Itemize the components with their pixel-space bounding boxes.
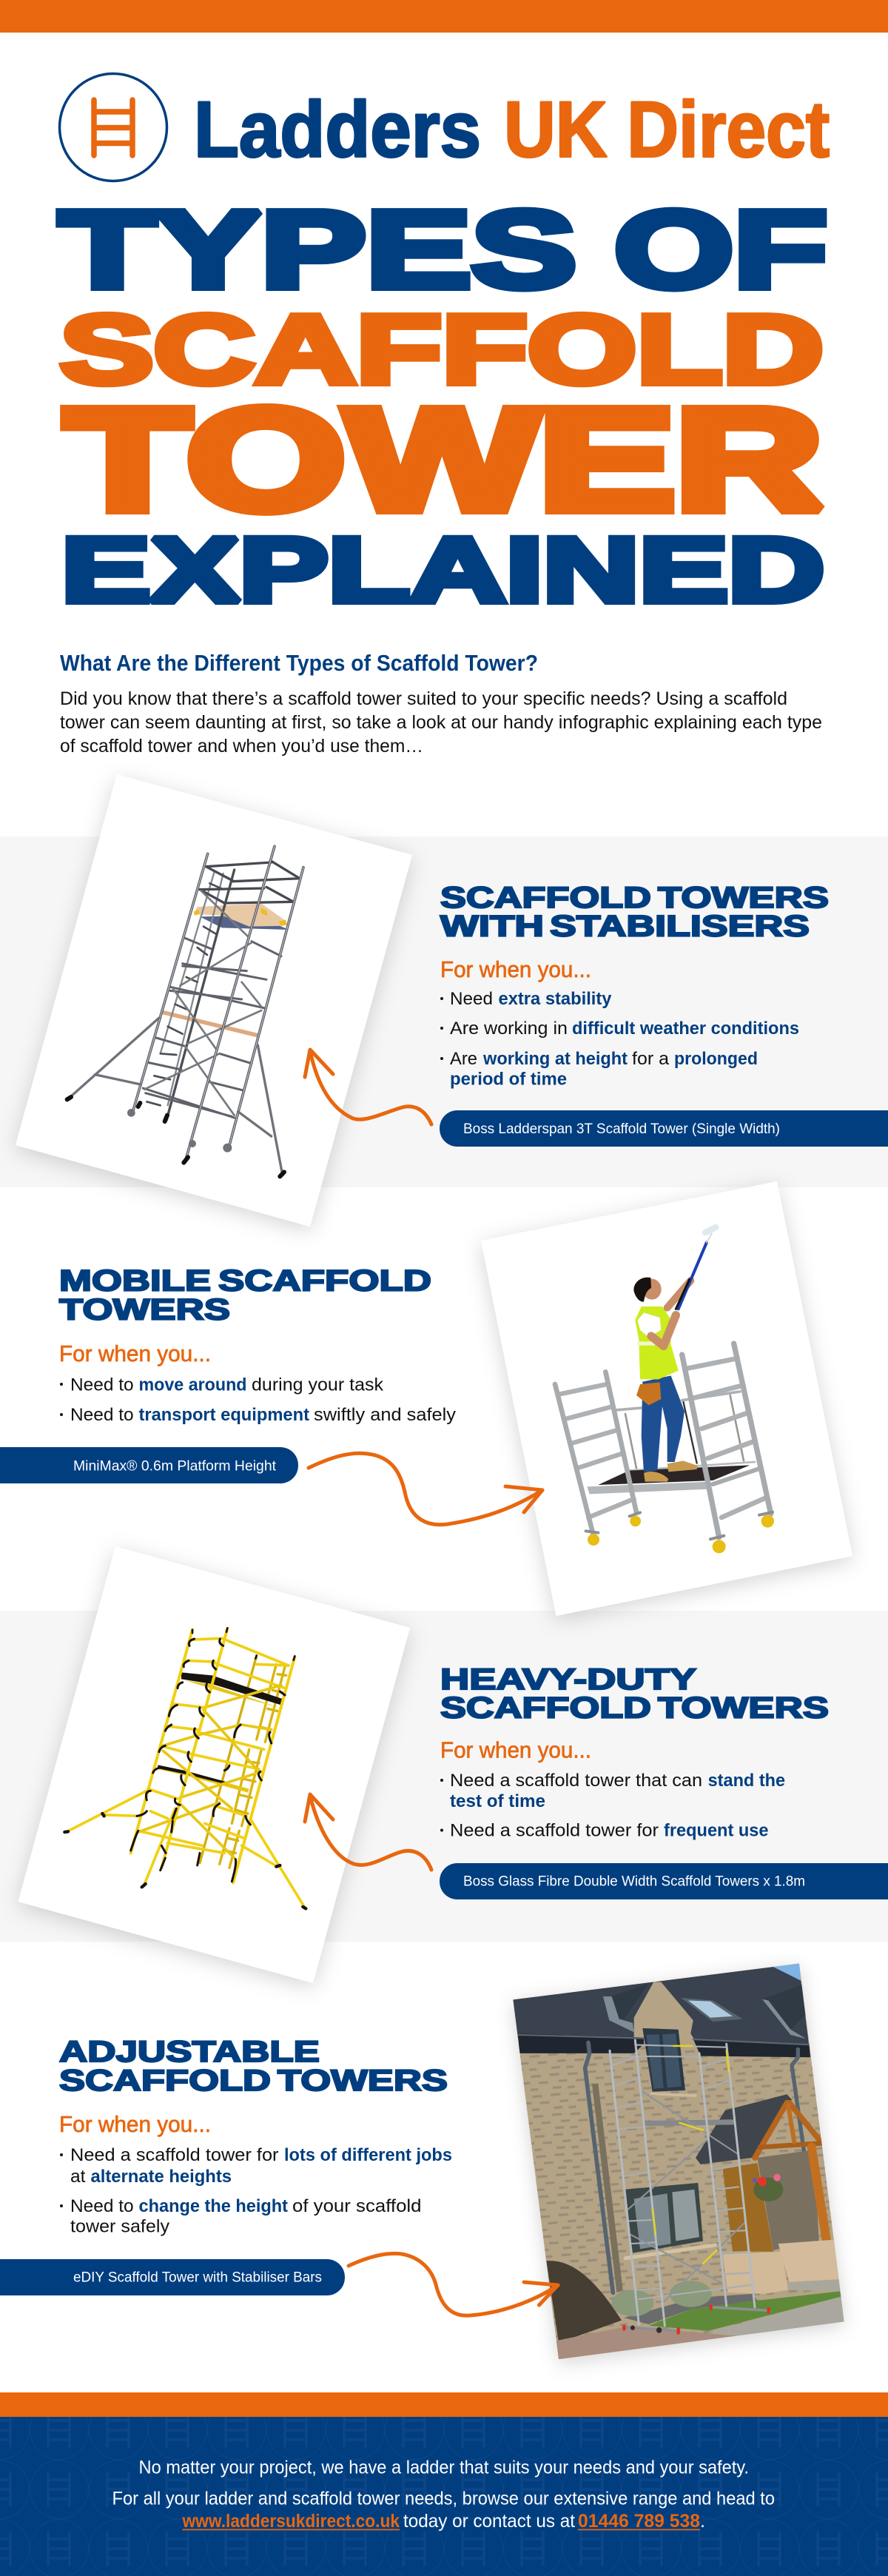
bullet list: transport equipment [139, 1405, 309, 1425]
product pill: MiniMax® 0.6m Platform Height [73, 1458, 277, 1475]
bullet list: lots of different jobs [284, 2145, 452, 2165]
bullet list: of your scaffold [292, 2196, 422, 2216]
title line: TYPES OF: TYPES [59, 189, 576, 311]
bullet list: test of time [450, 1791, 545, 1811]
intro paragraph [60, 688, 822, 757]
bullet list: alternate heights [90, 2167, 232, 2187]
product pill [0, 2259, 345, 2295]
bullet list [440, 1771, 785, 1840]
bullet list: change the height [139, 2196, 288, 2216]
panel: section 3 text [305, 1663, 888, 1899]
arrow to house photo [349, 2253, 558, 2315]
arrow to heavy-duty tower photo [305, 1794, 431, 1870]
product pill: eDIY Scaffold Tower with Stabiliser Bars [73, 2270, 322, 2286]
heading: mobile scaffold towers: SCAFFOLD [218, 1264, 431, 1297]
bullet list: extra stability [499, 989, 612, 1009]
bullet list [60, 2145, 452, 2237]
panel: section 4 text [0, 2036, 452, 2295]
footer line 1: No matter your project, we have a ladder that suits your needs and your safety. [139, 2458, 749, 2478]
bullet list: difficult weather conditions [572, 1019, 799, 1039]
logo [59, 74, 830, 181]
panel: photo card mobile scaffold tower [481, 1181, 852, 1616]
sub-heading: for when you: For when you... [59, 2111, 211, 2137]
intro paragraph: of scaffold tower and when you’d use them… [60, 736, 423, 757]
sub-heading: for when you: For when you... [440, 956, 591, 982]
panel: footer [0, 2417, 888, 2576]
footer line 3 with links: 01446 789 538 [578, 2511, 700, 2532]
heading: scaffold towers with stabilisers: WITH [440, 910, 544, 943]
bullet list: working at height [482, 1049, 628, 1069]
bullet list: swiftly and safely [314, 1405, 457, 1425]
panel: photo of adjustable tower on house [513, 1963, 844, 2359]
sub-heading: for when you: For when you... [59, 1341, 211, 1366]
footer line 3 with links: . [700, 2511, 705, 2532]
product pill [440, 1110, 888, 1147]
heading: scaffold towers with stabilisers: SCAFFOLD [440, 882, 651, 914]
sub-heading: for when you: For when you... [440, 1737, 591, 1763]
bullet list: Need to [70, 2196, 134, 2216]
heading: adjustable scaffold towers: TOWERS [278, 2065, 448, 2097]
heading: scaffold towers with stabilisers: TOWERS [658, 882, 829, 914]
icon: worker painting on mobile tower [555, 1227, 774, 1553]
bullet list: move around [139, 1375, 247, 1395]
heading: heavy-duty scaffold towers [440, 1663, 829, 1725]
grey band section 1 [0, 836, 888, 1187]
bullet list: Need a scaffold tower that can [450, 1771, 702, 1791]
panel: section 1 text [305, 882, 888, 1147]
title line: EXPLAINED: EXPLAINED [61, 520, 824, 622]
arrow to mobile tower photo [309, 1453, 542, 1525]
heading: heavy-duty scaffold towers: SCAFFOLD [440, 1692, 651, 1725]
main title [59, 189, 827, 622]
bullet list: Are working in [450, 1019, 568, 1039]
icon: grey scaffold tower with stabilisers [67, 846, 303, 1176]
bullet list: Need a scaffold tower for [450, 1821, 659, 1840]
heading: scaffold towers with stabilisers: STABILISERS [550, 910, 810, 943]
heading: mobile scaffold towers: TOWERS [59, 1294, 230, 1326]
panel: photo card heavy-duty tower [18, 1546, 410, 1983]
bullet list: tower safely [70, 2216, 170, 2237]
bullet list: frequent use [664, 1821, 768, 1840]
product pill: Boss Ladderspan 3T Scaffold Tower (Single Width) [463, 1121, 780, 1137]
heading: heavy-duty scaffold towers: TOWERS [658, 1692, 829, 1725]
bullet list [60, 1375, 457, 1425]
panel: photo card scaffold tower with stabilisers [16, 774, 412, 1227]
title line: TYPES OF [59, 189, 827, 311]
product pill: Boss Glass Fibre Double Width Scaffold Towers x 1.8m [463, 1873, 805, 1889]
intro heading: What Are the Different Types of Scaffold Tower? [60, 650, 538, 676]
title line: TYPES OF: OF [614, 189, 827, 311]
bullet list: period of time [450, 1069, 567, 1090]
bullet list: at [70, 2167, 86, 2187]
footer line 3 with links [182, 2511, 705, 2532]
heading: adjustable scaffold towers [59, 2036, 448, 2097]
bullet list: stand the [708, 1771, 785, 1791]
title line: TOWER: TOWER [65, 379, 823, 540]
bullet list: prolonged [674, 1049, 758, 1069]
title line: SCAFFOLD: SCAFFOLD [60, 295, 824, 404]
arrow to tower photo [305, 1050, 431, 1124]
footer line 3 with links: today or contact us at [403, 2511, 575, 2532]
product pill [0, 1447, 298, 1483]
top orange bar [0, 0, 888, 33]
bullet list [440, 989, 799, 1090]
heading: heavy-duty scaffold towers: HEAVY-DUTY [440, 1663, 696, 1696]
footer line 3 with links: www.laddersukdirect.co.uk [182, 2511, 400, 2532]
product pill [440, 1863, 888, 1899]
icon: yellow fibreglass scaffold tower [64, 1628, 306, 1908]
panel: section 2 text [0, 1264, 457, 1483]
bullet list: Need to [70, 1375, 134, 1395]
grey band section 3 [0, 1611, 888, 1942]
bullet list: Need [450, 989, 493, 1009]
heading: adjustable scaffold towers: ADJUSTABLE [59, 2036, 320, 2068]
bullet list: Are [450, 1049, 477, 1069]
footer line 2: For all your ladder and scaffold tower needs, browse our extensive range and head to [112, 2489, 775, 2509]
heading: mobile scaffold towers: MOBILE [59, 1264, 211, 1297]
logo wordmark: UK Direct: UK Direct [504, 84, 830, 173]
icon: ladder in circle [59, 74, 167, 181]
intro paragraph: tower can seem daunting at first, so take a look at our handy infographic explaining each type [60, 712, 822, 733]
heading: mobile scaffold towers [59, 1264, 431, 1326]
heading: adjustable scaffold towers: SCAFFOLD [59, 2065, 271, 2097]
bullet list: during your task [252, 1375, 384, 1395]
bullet list: Need a scaffold tower for [70, 2145, 278, 2165]
footer orange bar [0, 2392, 888, 2417]
bullet list: for a [632, 1049, 669, 1069]
logo wordmark: Ladders: Ladders [194, 84, 481, 173]
intro paragraph: Did you know that there’s a scaffold tower suited to your specific needs? Using a scaffold [60, 688, 787, 709]
heading: scaffold towers with stabilisers [440, 882, 829, 943]
bullet list: Need to [70, 1405, 134, 1425]
